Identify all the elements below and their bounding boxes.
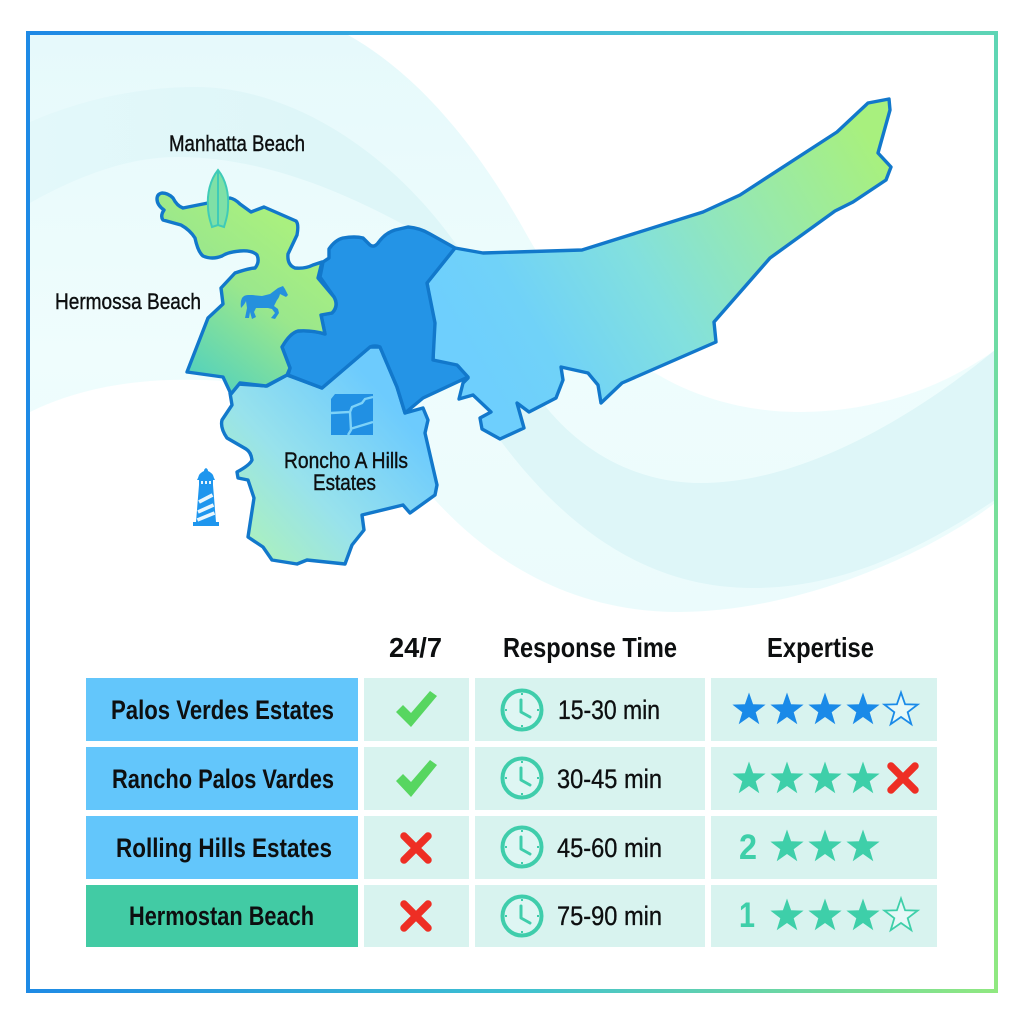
region: east peninsula [427, 99, 891, 439]
row: Palos Verdes Estates: 15-30 min [558, 695, 660, 725]
label: Manhattan Beach: Manhatta Beach [169, 131, 305, 156]
row: Rancho Palos Verdes: 30-45 min [557, 764, 662, 794]
background waves [30, 35, 995, 612]
row: Hermosa Beach: 75-90 min [557, 901, 662, 931]
region: Rancho / Rolling Hills [222, 347, 437, 564]
icon: lighthouse [193, 468, 219, 526]
icon: horse [241, 286, 288, 319]
table header: Response Time [503, 632, 677, 663]
table header [389, 632, 874, 663]
label: Rancho Hills Estates: Roncho A Hills [284, 448, 408, 473]
region: central dark blue [282, 227, 468, 413]
region: Manhattan and Hermosa [157, 193, 336, 394]
row: Hermosa Beach: 1 [739, 896, 755, 935]
row: Rolling Hills Estates: Rolling Hills Estates [116, 833, 332, 863]
row: Rancho Palos Verdes [86, 747, 937, 810]
table header: 24/7 [389, 632, 442, 663]
label: Rancho Hills Estates: Estates [313, 470, 376, 495]
icon: tract map tile [331, 394, 373, 435]
row: Hermosa Beach: Hermostan Beach [129, 901, 314, 931]
row: Hermosa Beach [86, 885, 937, 947]
icon: surfboard [208, 170, 228, 227]
row: Rolling Hills Estates: 45-60 min [557, 833, 662, 863]
row: Palos Verdes Estates [86, 678, 937, 741]
row: Rolling Hills Estates [86, 816, 937, 879]
row: Rancho Palos Verdes: Rancho Palos Vardes [112, 764, 334, 794]
row: Rolling Hills Estates: 2 [739, 828, 757, 867]
map of the peninsula [157, 99, 891, 564]
table header: Expertise [767, 632, 874, 663]
label: Hermosa Beach: Hermossa Beach [55, 289, 201, 314]
label: Rancho Hills Estates [284, 448, 408, 495]
row: Palos Verdes Estates: Palos Verdes Estates [111, 695, 334, 725]
comparison table [86, 632, 937, 947]
